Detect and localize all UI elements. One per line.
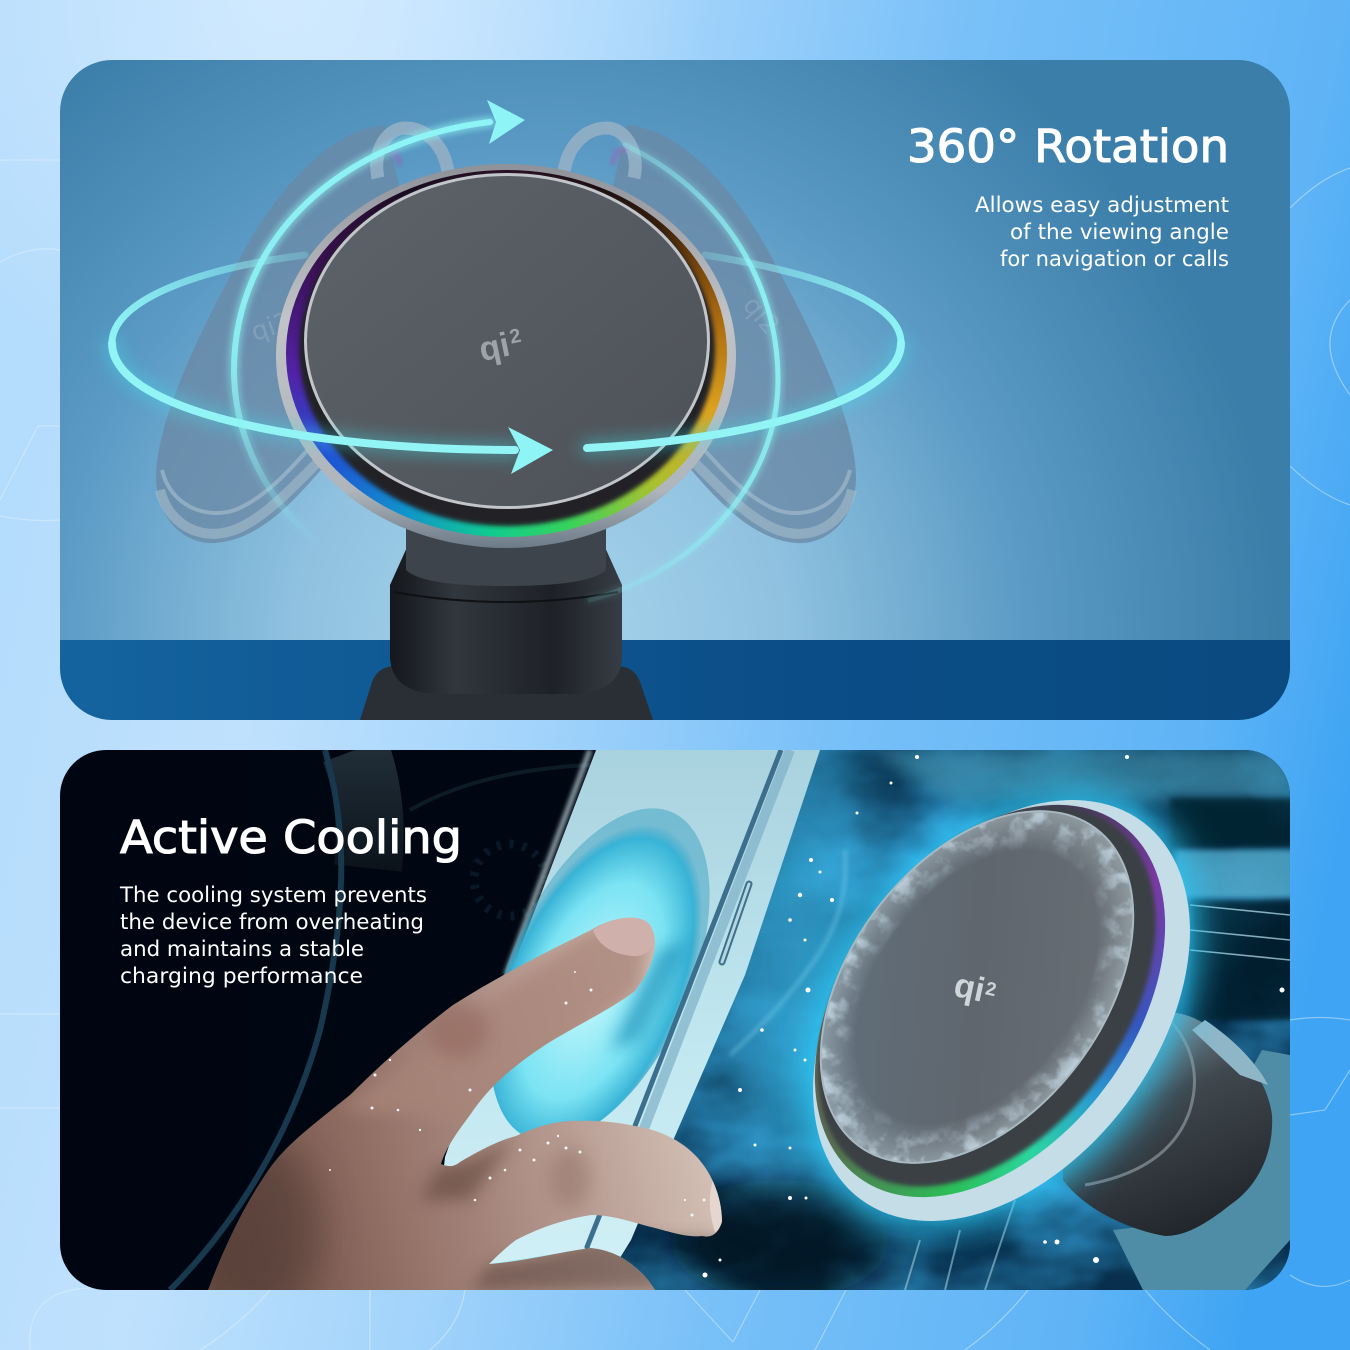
qi2 logo: 2	[508, 325, 523, 349]
ghost qi2 logo left: qi2	[247, 307, 295, 348]
ghost mount motion right	[564, 125, 856, 543]
arrowheads	[487, 100, 553, 474]
cooled charger mount arm	[1063, 1012, 1290, 1290]
frost specks on hand	[329, 971, 706, 1216]
LED groove	[814, 804, 1166, 1198]
text block: rotation description: for navigation or calls	[1000, 247, 1229, 271]
text block: rotation description	[975, 193, 1229, 271]
dark car interior	[60, 750, 1290, 1290]
mount base	[360, 525, 653, 720]
icy mist background	[620, 750, 1290, 1290]
phone with frost	[430, 750, 820, 1290]
frost on disc	[822, 812, 1132, 1162]
text block: cooling description: and maintains a stable	[120, 937, 364, 961]
qi2 logo: 2	[983, 979, 998, 1001]
table surface	[60, 640, 1290, 720]
cooled charger head	[783, 768, 1228, 1257]
panel: active cooling	[60, 750, 1290, 1290]
text block: cooling description	[119, 883, 427, 988]
qi2 logo: qi	[476, 326, 513, 369]
ice particles	[702, 755, 1284, 1278]
text block: cooling description: charging performance	[120, 964, 363, 988]
magnetic charger head	[276, 164, 736, 548]
text block: rotation description: Allows easy adjustment	[975, 193, 1229, 217]
knuckle	[428, 1002, 488, 1058]
ghost qi2 logo right: qi2	[736, 291, 785, 341]
heading: active cooling: Active Cooling	[120, 811, 462, 864]
arrows: rotation paths	[112, 122, 901, 600]
panel background wall	[60, 60, 1290, 645]
qi2 logo: qi	[951, 966, 988, 1010]
panel: 360 rotation	[60, 60, 1290, 720]
text block: cooling description: the device from overheating	[120, 910, 424, 934]
phone back glow	[493, 808, 710, 1134]
text block: cooling description: The cooling system prevents	[119, 883, 427, 907]
text block: rotation description: of the viewing angle	[1010, 220, 1229, 244]
heading: 360 rotation: 360° Rotation	[907, 120, 1229, 173]
fingernail	[593, 918, 654, 956]
ghost mount motion left	[156, 125, 448, 543]
rainbow LED ring	[286, 170, 727, 537]
index finger tone	[340, 930, 650, 1120]
hand	[208, 918, 722, 1290]
